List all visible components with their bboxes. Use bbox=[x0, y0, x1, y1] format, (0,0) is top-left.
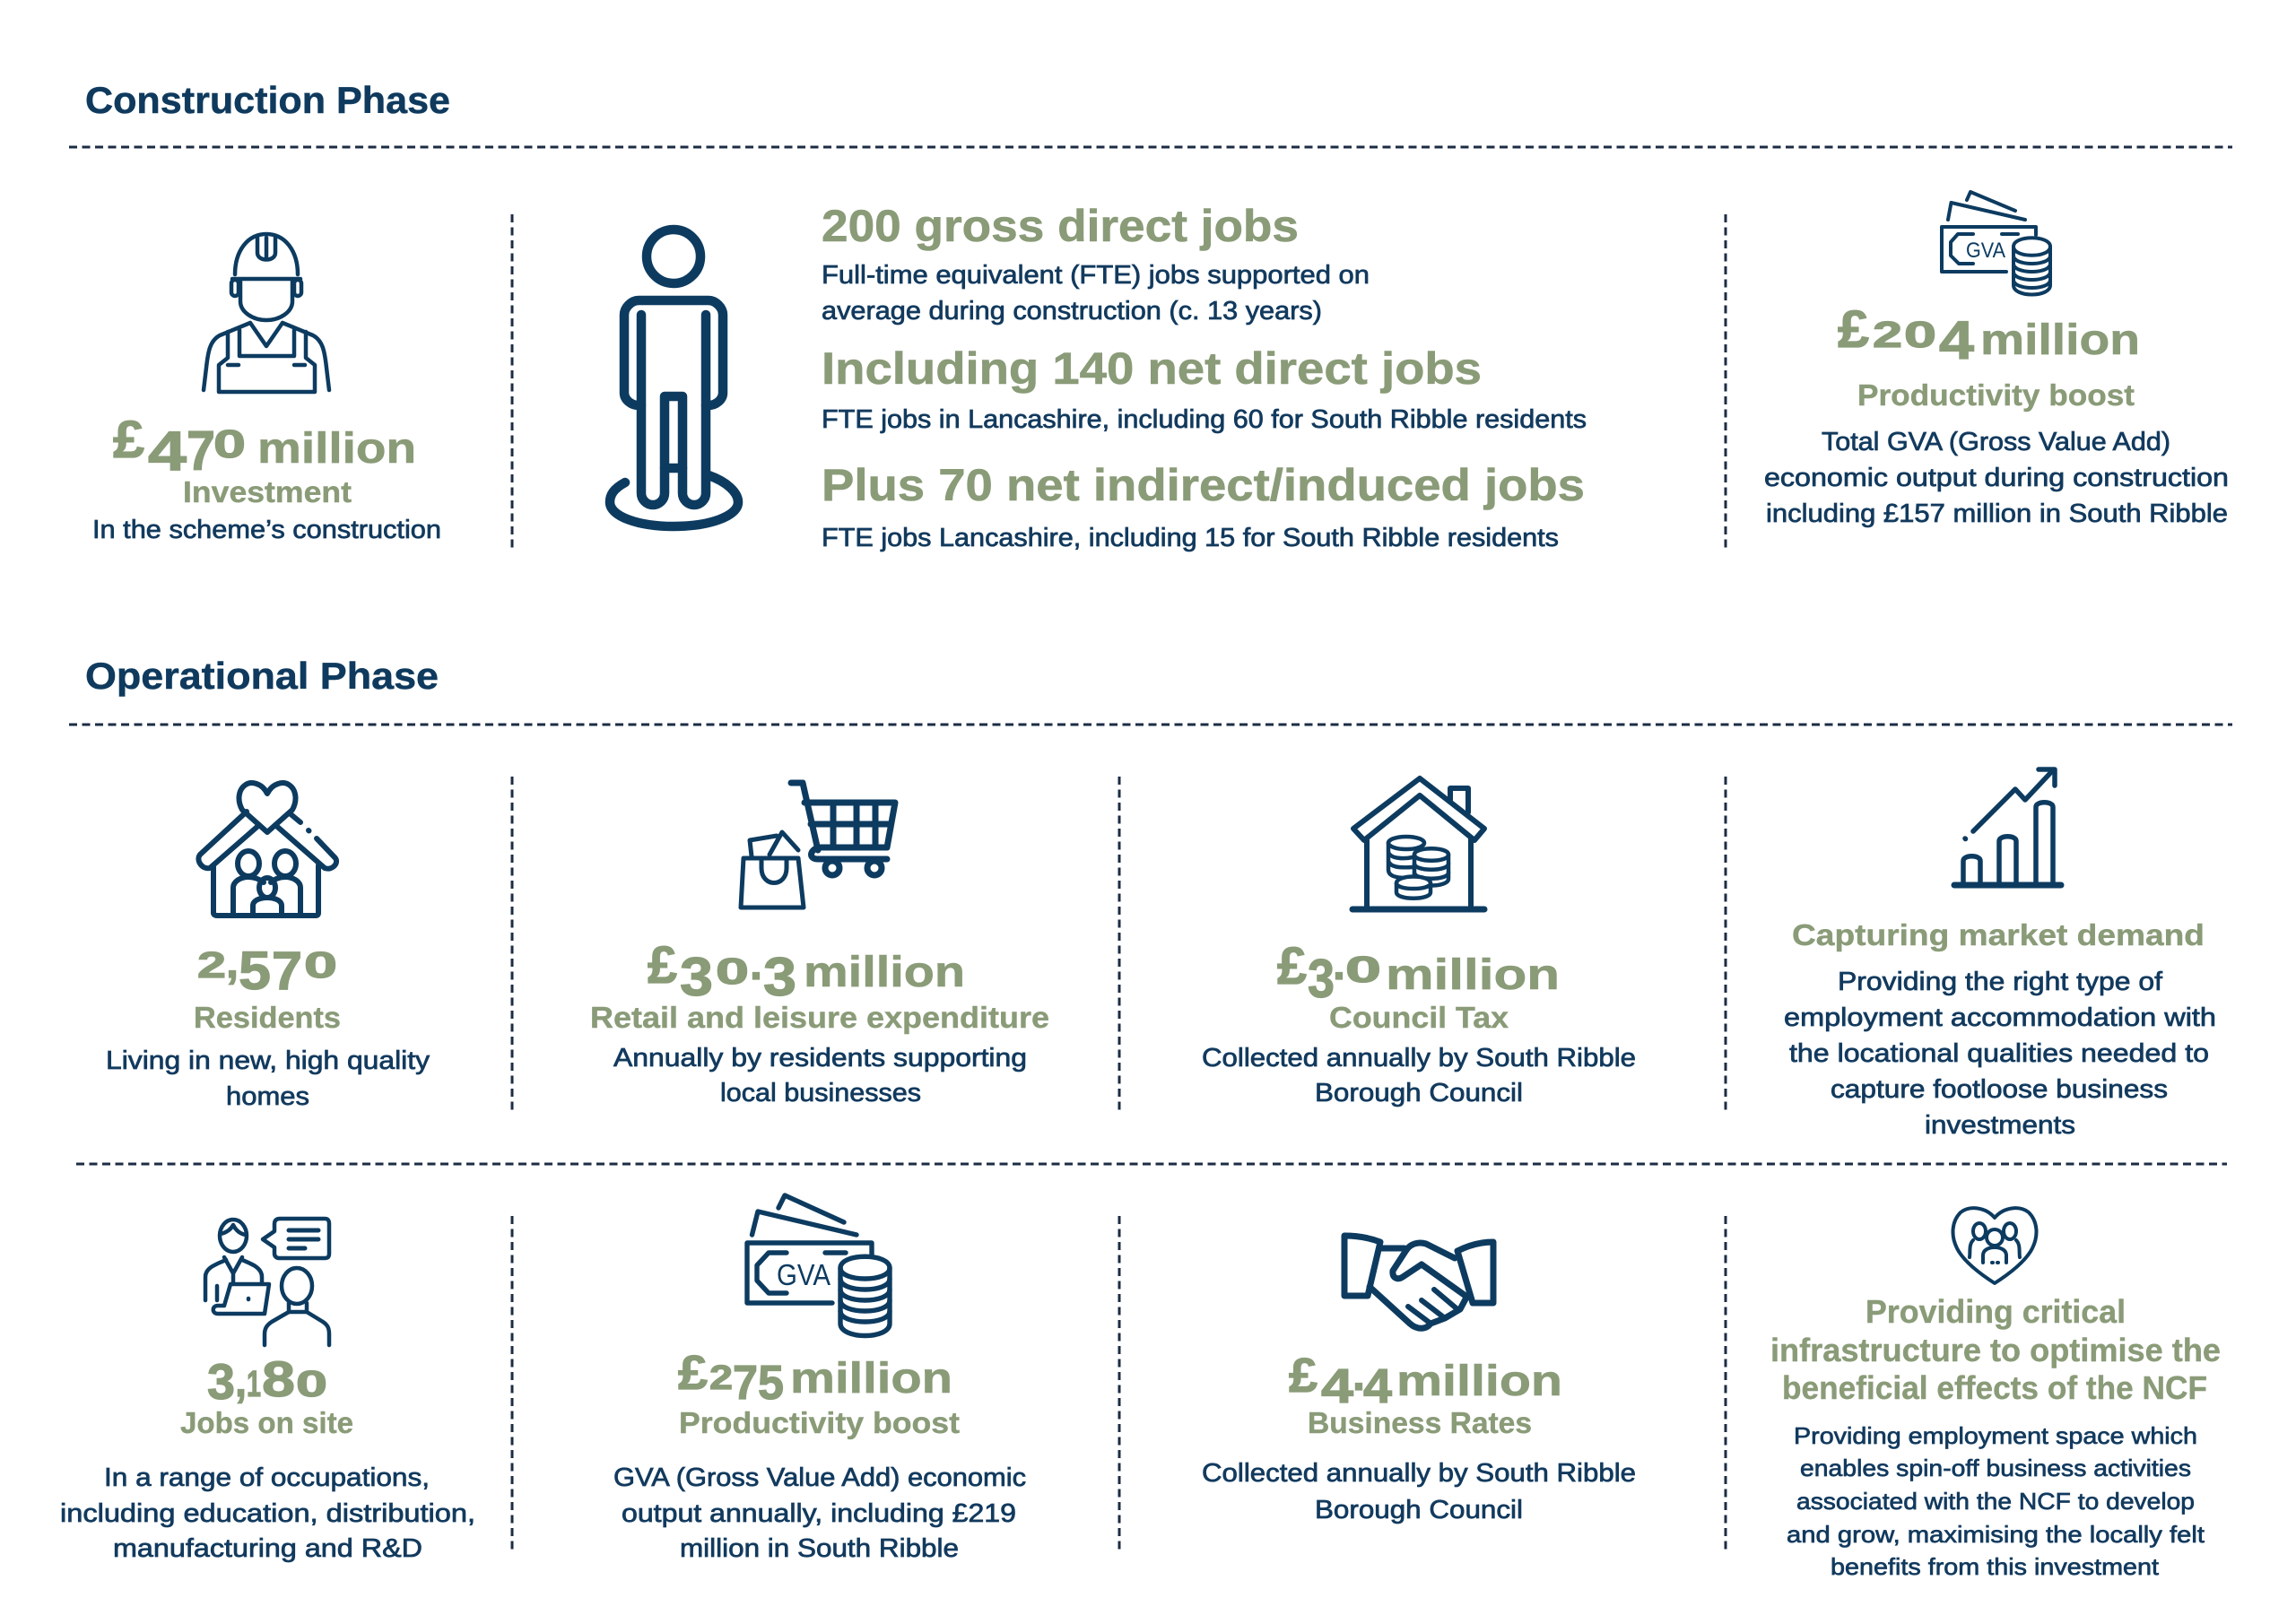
big number: 2,570: 7 bbox=[272, 941, 302, 1001]
panel: operational productivity boost bbox=[613, 1195, 1026, 1563]
icon: rising bar chart with arrow bbox=[1954, 769, 2061, 885]
icon: GVA banknotes and coins bbox=[747, 1195, 890, 1336]
big number: 3,180: 3 bbox=[207, 1353, 235, 1410]
panel: retail and leisure expenditure bbox=[590, 783, 1049, 1107]
big number: £30.3 million: 3 bbox=[680, 947, 713, 1007]
heading: Providing critical infrastructure: beneficial effects of the NCF bbox=[1782, 1369, 2207, 1406]
text: FTE description bbox=[822, 261, 1370, 326]
heading: Providing critical infrastructure bbox=[1770, 1293, 2221, 1406]
text: residents description: Living in new, high quality bbox=[106, 1046, 430, 1075]
big number: £3.0 million: 3 bbox=[1308, 949, 1335, 1009]
big number: £3.0 million bbox=[1277, 937, 1560, 1009]
text: expenditure description bbox=[613, 1044, 1027, 1107]
big number: £4.4 million: 4 bbox=[1321, 1359, 1353, 1413]
text: business rates description: Collected annually by South Ribble bbox=[1202, 1459, 1636, 1488]
big number: £470 million: £ bbox=[113, 411, 144, 469]
big number: £30.3 million: £ bbox=[648, 936, 677, 994]
text: GVA description: Total GVA (Gross Value Add) bbox=[1822, 428, 2170, 456]
text: GVA annual description bbox=[613, 1463, 1026, 1563]
big number: £275 million: 7 bbox=[733, 1356, 758, 1410]
text: jobs description: including education, distribution, bbox=[60, 1499, 475, 1528]
big number: £470 million: 7 bbox=[187, 421, 215, 482]
big number: £30.3 million bbox=[648, 936, 965, 1007]
panel: jobs on site bbox=[60, 1219, 475, 1563]
text: market demand description: capture footloose business bbox=[1831, 1075, 2168, 1104]
text: council tax description bbox=[1202, 1044, 1636, 1107]
heading: 200 gross direct jobs: 200 gross direct jobs bbox=[822, 201, 1299, 251]
heading: Including 140 net direct jobs: Including 140 net direct jobs bbox=[822, 343, 1482, 394]
label: Retail and leisure expenditure: Retail and leisure expenditure bbox=[590, 1001, 1049, 1034]
text: GVA annual description: output annually, including £219 bbox=[622, 1499, 1016, 1528]
big number: £3.0 million: 0 bbox=[1345, 949, 1381, 990]
big number: £275 million: 5 bbox=[758, 1356, 784, 1410]
big number: £275 million: million bbox=[790, 1355, 952, 1403]
big number: £470 million: million bbox=[257, 425, 416, 473]
big number: £3.0 million: £ bbox=[1277, 937, 1307, 995]
big number: 2,570 bbox=[197, 937, 337, 1001]
big number: 2,570: 5 bbox=[239, 941, 271, 1001]
text: infrastructure description: benefits from this investment bbox=[1831, 1553, 2160, 1580]
label: Capturing market demand: Capturing market demand bbox=[1792, 918, 2205, 951]
big number: £470 million bbox=[113, 411, 416, 482]
big number: 3,180 bbox=[207, 1350, 327, 1410]
big number: £204 million: 4 bbox=[1939, 310, 1975, 370]
icon: two people talking with laptop bbox=[205, 1219, 329, 1345]
icon: standing person bbox=[610, 230, 738, 526]
label: Jobs on site: Jobs on site bbox=[180, 1406, 353, 1439]
icon: handshake bbox=[1344, 1236, 1493, 1328]
label: Council Tax: Council Tax bbox=[1329, 1001, 1509, 1034]
text: jobs description: In a range of occupations, bbox=[104, 1463, 430, 1492]
text: expenditure description: local businesses bbox=[720, 1079, 921, 1107]
text: infrastructure description: enables spin-off business activities bbox=[1800, 1455, 2191, 1481]
big number: £204 million: 0 bbox=[1904, 314, 1936, 355]
label: Residents: Residents bbox=[194, 1001, 341, 1034]
big number: £3.0 million: . bbox=[1333, 939, 1345, 989]
icon: GVA banknotes and coins bbox=[1942, 192, 2050, 294]
icon: GVA banknotes and coins: GVA bbox=[777, 1258, 831, 1291]
big number: £30.3 million: . bbox=[750, 939, 762, 989]
text: GVA annual description: GVA (Gross Value Add) economic bbox=[613, 1463, 1026, 1492]
label: Productivity boost: Productivity boost bbox=[1857, 378, 2135, 412]
big number: £4.4 million: 4 bbox=[1363, 1359, 1392, 1413]
text: infrastructure description bbox=[1787, 1422, 2205, 1580]
heading: Providing critical infrastructure: Providing critical bbox=[1866, 1293, 2126, 1330]
big number: £3.0 million: million bbox=[1386, 951, 1560, 999]
text: investment description: In the scheme’s construction bbox=[92, 516, 441, 544]
text: indirect jobs detail: FTE jobs Lancashire, including 15 for South Ribble residents bbox=[822, 524, 1559, 552]
big number: £204 million: million bbox=[1980, 317, 2140, 364]
big number: £4.4 million: million bbox=[1396, 1358, 1562, 1405]
big number: £204 million bbox=[1838, 300, 2140, 370]
icon: house with heart and family bbox=[198, 783, 336, 916]
big number: £4.4 million: £ bbox=[1289, 1349, 1318, 1403]
text: FTE description: average during construction (c. 13 years) bbox=[822, 297, 1322, 326]
big number: £470 million: 0 bbox=[213, 422, 246, 466]
heading: Construction Phase: Construction Phase bbox=[85, 79, 450, 121]
text: GVA description: including £157 million in South Ribble bbox=[1766, 499, 2228, 528]
big number: £30.3 million: million bbox=[804, 949, 965, 996]
big number: £30.3 million: 3 bbox=[763, 947, 796, 1007]
big number: £470 million: 4 bbox=[148, 421, 187, 482]
big number: £4.4 million: . bbox=[1352, 1350, 1365, 1400]
text: jobs description bbox=[60, 1463, 475, 1563]
label: Investment: Investment bbox=[183, 475, 352, 508]
text: GVA annual description: million in South Ribble bbox=[680, 1534, 959, 1563]
text: infrastructure description: and grow, maximising the locally felt bbox=[1787, 1521, 2205, 1548]
big number: 3,180: , bbox=[235, 1356, 247, 1406]
text: GVA description: economic output during construction bbox=[1764, 464, 2229, 492]
text: council tax description: Borough Council bbox=[1315, 1079, 1523, 1107]
big number: £275 million: £ bbox=[678, 1346, 708, 1400]
icon: heart with people bbox=[1952, 1208, 2037, 1283]
text: net direct jobs detail: FTE jobs in Lancashire, including 60 for South Ribble residents bbox=[822, 405, 1587, 434]
icon: house with coins bbox=[1352, 778, 1484, 909]
icon: construction worker bbox=[204, 234, 329, 392]
heading: Providing critical infrastructure: infrastructure to optimise the bbox=[1770, 1332, 2221, 1368]
panel: residents bbox=[106, 783, 430, 1111]
text: market demand description: investments bbox=[1925, 1111, 2075, 1140]
icon: shopping cart and bag bbox=[741, 783, 895, 908]
panel: investment bbox=[92, 234, 441, 544]
label: Business Rates: Business Rates bbox=[1308, 1406, 1532, 1439]
panel: council tax bbox=[1202, 778, 1636, 1107]
text: market demand description: employment accommodation with bbox=[1784, 1003, 2216, 1032]
heading: Operational Phase: Operational Phase bbox=[85, 655, 439, 697]
text: residents description bbox=[106, 1046, 430, 1111]
text: infrastructure description: Providing employment space which bbox=[1794, 1422, 2197, 1449]
text: residents description: homes bbox=[226, 1082, 309, 1111]
big number: 3,180: 8 bbox=[262, 1350, 295, 1407]
label: Productivity boost: Productivity boost bbox=[679, 1406, 960, 1439]
big number: £4.4 million bbox=[1289, 1349, 1562, 1413]
big number: 3,180: 0 bbox=[296, 1363, 327, 1404]
panel: construction productivity boost bbox=[1764, 192, 2229, 528]
text: council tax description: Collected annually by South Ribble bbox=[1202, 1044, 1636, 1073]
icon: GVA banknotes and coins: GVA bbox=[1966, 239, 2005, 263]
big number: £275 million: 2 bbox=[709, 1359, 733, 1397]
text: market demand description: the locational qualities needed to bbox=[1789, 1039, 2209, 1068]
big number: 2,570: , bbox=[226, 937, 239, 987]
big number: £204 million: £ bbox=[1838, 300, 1869, 359]
heading: Plus 70 net indirect/induced jobs: Plus 70 net indirect/induced jobs bbox=[822, 460, 1585, 510]
text: market demand description bbox=[1784, 968, 2216, 1140]
panel: critical infrastructure bbox=[1770, 1208, 2221, 1580]
text: expenditure description: Annually by residents supporting bbox=[613, 1044, 1027, 1073]
big number: £30.3 million: 0 bbox=[716, 951, 749, 992]
text: GVA description bbox=[1764, 428, 2229, 528]
text: FTE description: Full-time equivalent (FTE) jobs supported on bbox=[822, 261, 1370, 290]
text: business rates description: Borough Council bbox=[1315, 1496, 1523, 1524]
panel: business rates bbox=[1202, 1236, 1636, 1524]
text: business rates description bbox=[1202, 1459, 1636, 1524]
big number: 3,180: 1 bbox=[247, 1363, 261, 1404]
text: jobs description: manufacturing and R&D bbox=[113, 1534, 422, 1563]
big number: £275 million bbox=[678, 1346, 952, 1410]
panel: construction jobs bbox=[610, 201, 1587, 552]
big number: 2,570: 0 bbox=[304, 944, 337, 986]
panel: capturing market demand bbox=[1784, 769, 2216, 1140]
big number: 2,570: 2 bbox=[197, 944, 226, 986]
text: infrastructure description: associated with the NCF to develop bbox=[1796, 1488, 2195, 1515]
text: market demand description: Providing the right type of bbox=[1838, 968, 2163, 996]
big number: £204 million: 2 bbox=[1873, 314, 1902, 355]
